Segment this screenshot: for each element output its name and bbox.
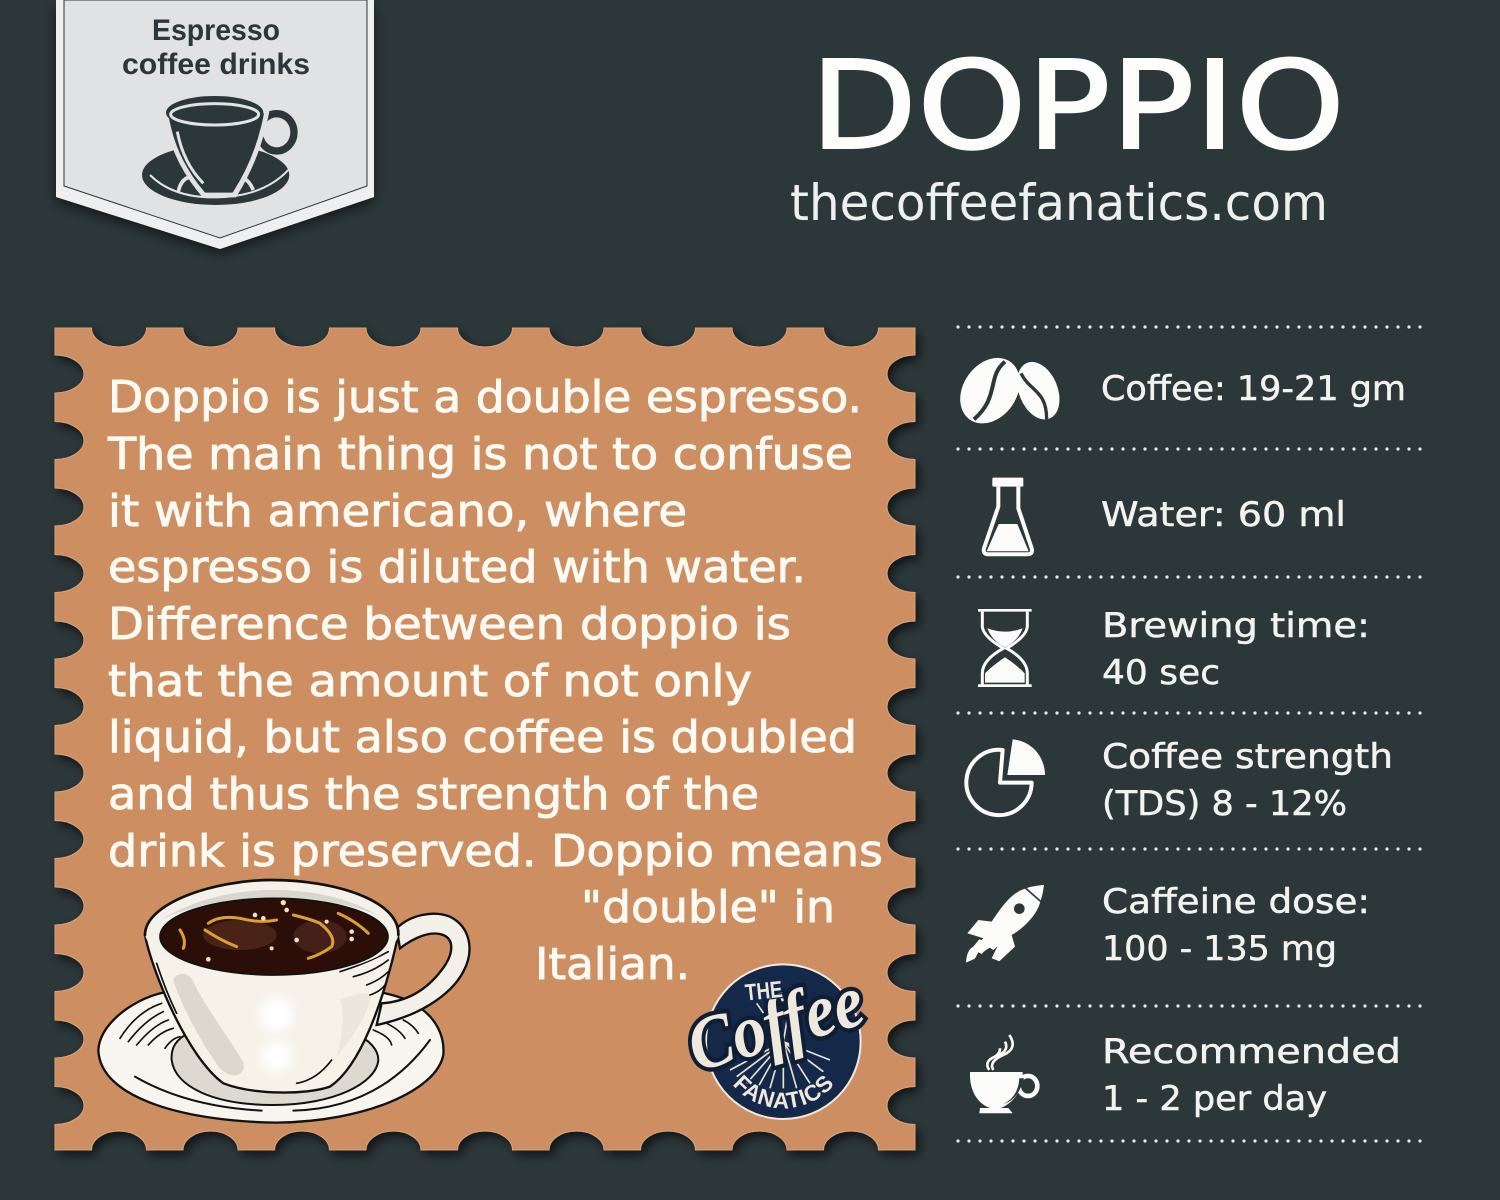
banner: espresso coffee drinks (56, 0, 374, 249)
label: caffeine dose: Caffeine dose: (1102, 882, 1370, 922)
label: brewing time: 40 sec (1102, 653, 1220, 693)
label: recommended servings: Recommended (1102, 1032, 1401, 1072)
label: brewing time: Brewing time: (1102, 606, 1370, 646)
icon: rocket (966, 885, 1044, 963)
cup body (145, 935, 398, 1093)
website subtitle: thecoffeefanatics.com (790, 174, 1328, 232)
label: coffee amount: Coffee: 19-21 gm (1101, 369, 1406, 409)
label: caffeine dose: 100 - 135 mg (1102, 929, 1337, 969)
label: water amount: Water: 60 ml (1101, 495, 1346, 535)
label: coffee strength: Coffee strength (1102, 737, 1393, 777)
logo: the coffee fanatics: FANATICS (733, 1074, 832, 1109)
icon: steaming cup (970, 1035, 1037, 1113)
logo: the coffee fanatics: THE (744, 976, 784, 1006)
label: recommended servings: 1 - 2 per day (1102, 1079, 1327, 1119)
cup rim and coffee (145, 880, 398, 977)
banner heading: coffee drinks (122, 48, 310, 81)
title: DOPPIO (810, 35, 1345, 177)
description text: "double" in (581, 882, 835, 933)
icon: flask (984, 478, 1032, 554)
description text: it with americano, where (108, 486, 687, 537)
description text: that the amount of not only (108, 656, 752, 707)
banner heading: Espresso (152, 14, 280, 47)
description text: Doppio is just a double espresso. (108, 372, 862, 423)
description text: Difference between doppio is (108, 599, 791, 650)
description text: The main thing is not to confuse (107, 429, 853, 480)
label: coffee strength: (TDS) 8 - 12% (1102, 784, 1347, 824)
panel: stamp description (54, 328, 923, 1159)
logo: the coffee fanatics: Coffee (678, 959, 873, 1088)
icon: hourglass (978, 610, 1032, 686)
description text: Italian. (535, 939, 690, 990)
icon: banner cup and saucer (142, 96, 294, 205)
description text: drink is preserved. Doppio means (108, 826, 883, 877)
description text: liquid, but also coffee is doubled (108, 712, 857, 763)
illustration: coffee cup on saucer (98, 880, 469, 1123)
description text: espresso is diluted with water. (108, 542, 806, 593)
icon: pie chart (966, 739, 1045, 815)
icon: coffee beans (948, 346, 1067, 435)
description text: and thus the strength of the (108, 769, 759, 820)
